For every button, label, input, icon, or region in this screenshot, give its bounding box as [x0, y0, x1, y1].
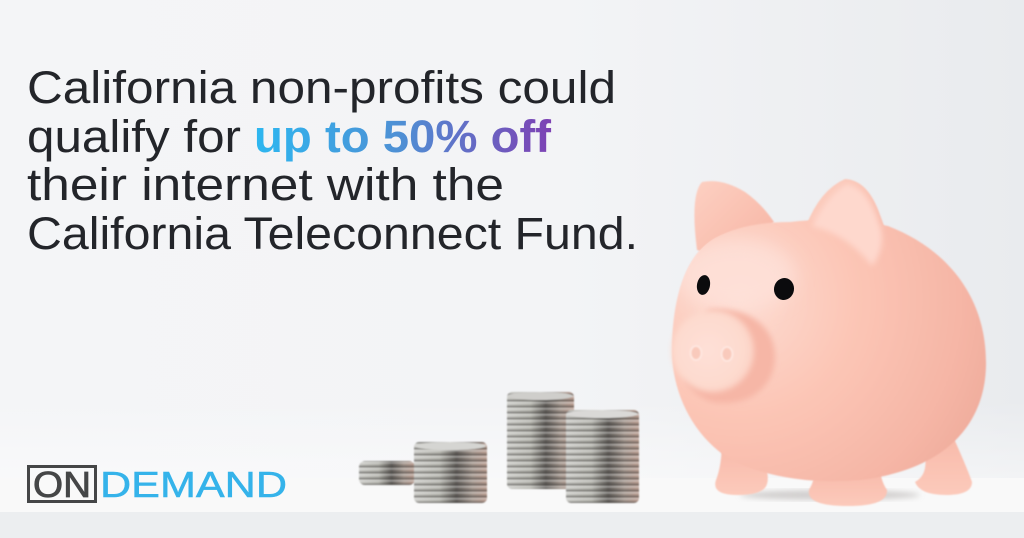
logo box with ON: ON — [33, 464, 91, 505]
pig snout — [672, 309, 775, 403]
pig nostrils — [690, 346, 732, 361]
pig body — [672, 220, 986, 481]
coin stack 4 — [566, 410, 639, 503]
logo: OnDemand — [28, 464, 287, 505]
pig shadow — [740, 490, 920, 500]
pig face highlight — [681, 238, 794, 303]
highlighted phrase: up to 50% off — [254, 111, 552, 162]
white shelf — [0, 400, 1024, 538]
headline text: their internet with the — [27, 159, 504, 210]
pig right ear front — [812, 184, 882, 266]
headline text: California Teleconnect Fund. — [27, 208, 638, 259]
pig eyes — [695, 274, 796, 302]
pig ears back — [694, 179, 889, 280]
coin stack 3 — [507, 392, 574, 489]
logo word DEMAND: DEMAND — [100, 464, 287, 505]
coin stack 2 — [414, 442, 487, 503]
headline text: qualify for — [27, 111, 241, 162]
coin stacks — [359, 392, 639, 503]
headline text: California non-profits could — [27, 62, 616, 113]
pig feet — [715, 430, 972, 506]
headline text — [27, 62, 638, 259]
piggy bank — [672, 179, 986, 506]
coin stack 1 — [359, 461, 415, 485]
